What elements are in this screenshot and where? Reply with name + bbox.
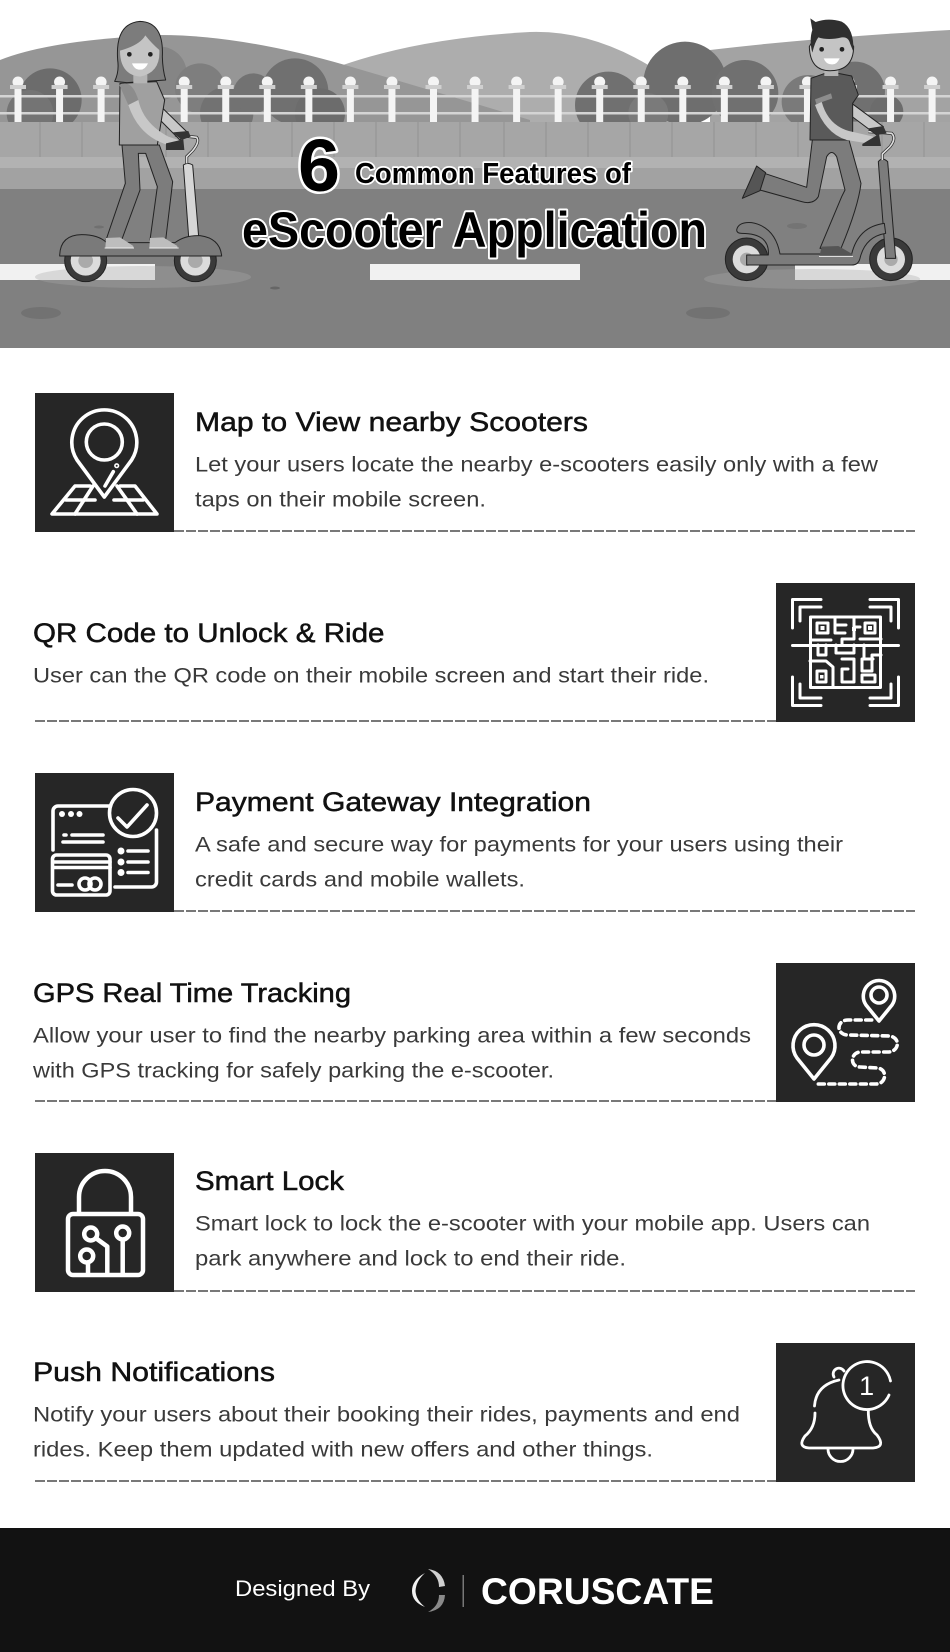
description: Let your users locate the nearby e-scooters easily only with a few: [195, 452, 879, 476]
description: taps on their mobile screen.: [195, 488, 486, 512]
feature: gps: [32, 963, 915, 1102]
title line 1: Common Features of: [355, 158, 631, 190]
heading: Push Notifications: [33, 1357, 275, 1387]
description: User can the QR code on their mobile screen and start their ride.: [33, 664, 709, 688]
background hills: [0, 30, 950, 130]
header illustration: [0, 18, 950, 348]
description: [32, 1024, 751, 1082]
description: credit cards and mobile wallets.: [195, 868, 525, 892]
feature: push notifications: [33, 1343, 915, 1482]
title line 2: eScooter Application: [242, 202, 707, 258]
wall: [0, 122, 950, 190]
legs: [106, 145, 173, 240]
fence: [0, 76, 950, 123]
feature: payment: [35, 773, 915, 912]
description: rides. Keep them updated with new offers and other things.: [33, 1438, 653, 1462]
description: with GPS tracking for safely parking the e-scooter.: [32, 1058, 554, 1082]
description: Notify your users about their booking their rides, payments and end: [33, 1402, 740, 1426]
feature: map: [35, 393, 915, 532]
icon: map pin: [35, 393, 174, 532]
head: [824, 67, 838, 76]
road: [0, 189, 950, 348]
logo: coruscate: CORUSCATE: [481, 1571, 714, 1612]
icon: qr code: [776, 583, 915, 722]
legs: [760, 140, 861, 248]
icon: payment: [35, 773, 174, 912]
heading: GPS Real Time Tracking: [33, 978, 351, 1008]
description: [195, 452, 879, 512]
icon: gps route: [776, 963, 915, 1102]
description: A safe and secure way for payments for your users using their: [195, 832, 843, 856]
hair and face: [115, 21, 166, 83]
scooter: [725, 238, 768, 281]
icon: smart lock: [35, 1153, 174, 1292]
bushes: [7, 42, 903, 140]
body: [850, 103, 883, 135]
icon: bell: 1: [859, 1371, 874, 1401]
icon: bell: [776, 1343, 915, 1482]
designed by label: Designed By: [235, 1576, 371, 1601]
feature: qr code: [33, 583, 915, 722]
body: [157, 105, 187, 140]
heading: Payment Gateway Integration: [195, 787, 591, 817]
description: Allow your user to find the nearby parking area within a few seconds: [33, 1024, 751, 1048]
girl on scooter: [60, 21, 222, 282]
heading: QR Code to Unlock & Ride: [33, 618, 384, 648]
scooter: [183, 163, 199, 237]
heading: Map to View nearby Scooters: [195, 407, 588, 437]
boy on scooter: [725, 18, 912, 281]
title: [242, 124, 707, 258]
title numeral: 6: [298, 124, 340, 207]
description: [195, 1212, 870, 1270]
heading: Smart Lock: [195, 1166, 345, 1196]
feature: smart lock: [35, 1153, 915, 1292]
description: Smart lock to lock the e-scooter with your mobile app. Users can: [195, 1212, 870, 1236]
description: [195, 832, 843, 892]
footer: [0, 1528, 950, 1652]
description: park anywhere and lock to end their ride.: [195, 1246, 626, 1270]
description: [33, 1402, 740, 1462]
